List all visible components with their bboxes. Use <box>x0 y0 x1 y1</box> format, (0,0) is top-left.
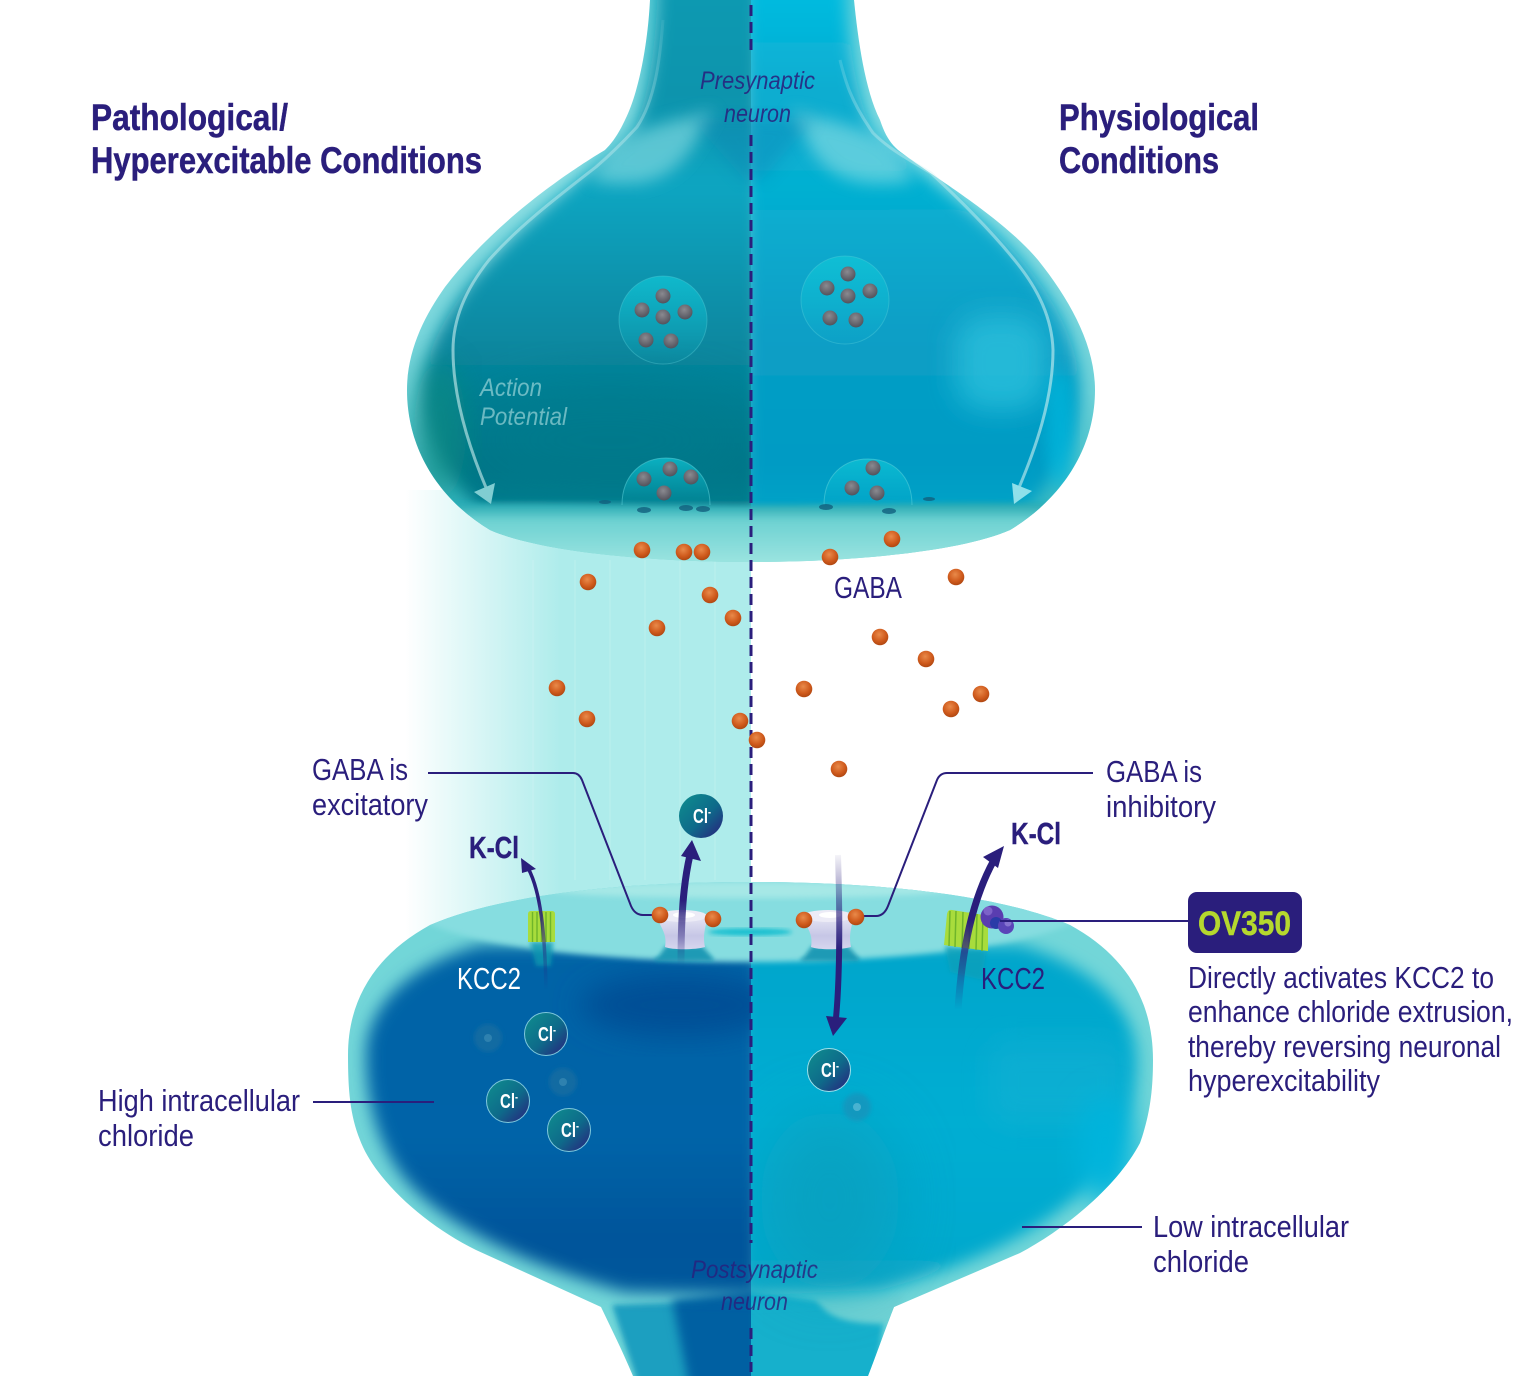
chloride ion: extruded <box>679 794 723 838</box>
vesicle: docked right <box>819 459 935 514</box>
title: pathological conditions: Pathological/ <box>91 97 288 138</box>
label: KCC2 right: KCC2 <box>981 961 1045 996</box>
callout: low intracellular chloride: chloride <box>1153 1244 1249 1279</box>
receptor: left <box>655 910 714 961</box>
chloride ions: intracellular left: Cl <box>538 1024 558 1046</box>
chloride ions: intracellular left: Cl <box>561 1120 581 1142</box>
label: action potential: Action <box>478 374 542 402</box>
callout: GABA is inhibitory: inhibitory <box>1106 789 1216 824</box>
chloride ions: intracellular left: Cl <box>500 1091 520 1113</box>
label: GABA: GABA <box>834 570 902 605</box>
label: presynaptic neuron: neuron <box>724 100 791 128</box>
callout: high intracellular chloride <box>98 1083 434 1153</box>
callout: high intracellular chloride: chloride <box>98 1118 194 1153</box>
title: physiological conditions <box>1059 97 1259 181</box>
vesicle: docked left <box>599 458 710 513</box>
callout: OV350 <box>1000 892 1302 953</box>
label: action potential <box>478 374 568 431</box>
presynaptic neuron <box>407 0 1095 575</box>
KCC2 transporter: right <box>944 910 988 980</box>
callout: GABA is excitatory <box>312 752 656 915</box>
label: postsynaptic neuron: neuron <box>721 1288 788 1316</box>
vesicle: upper left <box>619 276 707 364</box>
presynaptic membrane lens <box>454 500 1046 562</box>
callout: low intracellular chloride <box>1022 1209 1349 1279</box>
OV350 molecule <box>980 906 1014 934</box>
callout: high intracellular chloride: High intracellular <box>98 1083 300 1118</box>
label: presynaptic neuron: Presynaptic <box>700 67 815 95</box>
title: pathological conditions <box>91 97 482 181</box>
receptor: right <box>801 910 860 961</box>
text block: OV350 mechanism <box>1188 960 1513 1098</box>
chloride ions: intracellular left: - <box>553 1023 556 1037</box>
title: pathological conditions: Hyperexcitable Conditions <box>91 140 482 181</box>
chloride ions: intracellular left: - <box>515 1090 518 1104</box>
chloride ion: extruded: - <box>708 805 711 819</box>
callout: GABA is inhibitory: GABA is <box>1106 754 1202 789</box>
chloride ions: intracellular right: Cl <box>821 1060 841 1082</box>
callout: GABA is excitatory: excitatory <box>312 787 428 822</box>
title: physiological conditions: Physiological <box>1059 97 1259 138</box>
vesicle: upper right <box>801 256 889 344</box>
chloride ion: extruded: Cl <box>693 806 713 828</box>
postsynaptic membrane lens <box>430 882 1070 966</box>
panel: pathological synaptic cleft background <box>405 490 751 970</box>
chloride ions: intracellular left: - <box>576 1119 579 1133</box>
label: KCC2 left: KCC2 <box>457 961 521 996</box>
arrow: KCl efflux left (weak) <box>521 858 546 990</box>
KCC2 transporter: left <box>528 911 555 966</box>
callout: OV350: OV350 <box>1198 905 1291 943</box>
chloride ions: intracellular right: - <box>836 1059 839 1073</box>
chloride ions: intracellular left <box>474 1012 590 1152</box>
shoulders and central notch <box>590 110 715 184</box>
action potential arrow: right <box>840 60 1053 504</box>
label: action potential: Potential <box>480 403 568 431</box>
postsynaptic neuron <box>348 842 1153 1376</box>
label: presynaptic neuron <box>700 67 815 128</box>
action potential arrow: left <box>453 20 663 504</box>
chloride ions: intracellular right <box>808 1048 871 1121</box>
label: K-Cl right: K-Cl <box>1011 816 1061 851</box>
callout: GABA is inhibitory <box>860 754 1216 916</box>
callout: GABA is excitatory: GABA is <box>312 752 408 787</box>
GABA molecules <box>549 531 989 777</box>
arrow: chloride influx through receptor <box>826 855 847 1036</box>
title: physiological conditions: Conditions <box>1059 140 1219 181</box>
label: postsynaptic neuron: Postsynaptic <box>691 1256 818 1284</box>
dashed divider <box>750 5 752 1372</box>
arrow: chloride efflux through receptor <box>681 840 701 965</box>
text block: OV350 mechanism: hyperexcitability <box>1188 1063 1380 1098</box>
GABA bound to receptors <box>652 907 864 928</box>
callout: low intracellular chloride: Low intracellular <box>1153 1209 1349 1244</box>
arrow: KCl efflux right (strong) <box>958 846 1004 1010</box>
label: postsynaptic neuron <box>691 1256 818 1316</box>
label: K-Cl left: K-Cl <box>469 830 519 865</box>
